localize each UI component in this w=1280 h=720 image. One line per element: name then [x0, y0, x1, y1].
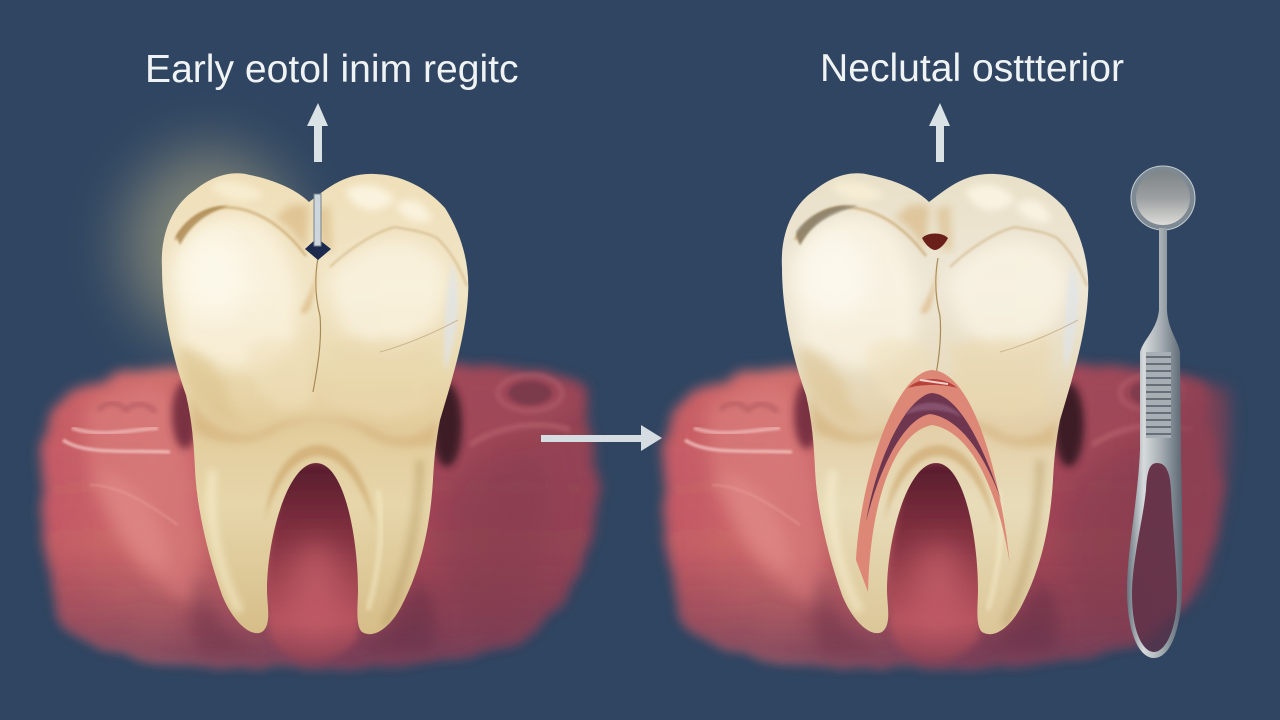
arrow up left — [307, 103, 328, 162]
arrow up right — [929, 103, 950, 162]
heading right: Neclutal osttterior — [820, 47, 1124, 90]
gum tissue left — [43, 367, 597, 665]
arrow: progression between teeth — [541, 425, 662, 451]
cavity right — [922, 234, 948, 250]
panel: later stage tooth — [665, 47, 1230, 665]
exposed pulp arch — [856, 370, 1010, 592]
icon: dental mirror instrument — [1127, 166, 1195, 658]
occlusal crease right — [796, 205, 858, 245]
molar tooth right — [782, 173, 1088, 634]
panel: early stage tooth — [43, 48, 597, 665]
early lesion cavity with probe — [305, 194, 331, 260]
heading left: Early eotol inim regitc — [145, 48, 519, 91]
glow behind crown — [125, 150, 295, 340]
molar tooth left — [162, 173, 468, 634]
gum tissue right — [665, 367, 1230, 665]
